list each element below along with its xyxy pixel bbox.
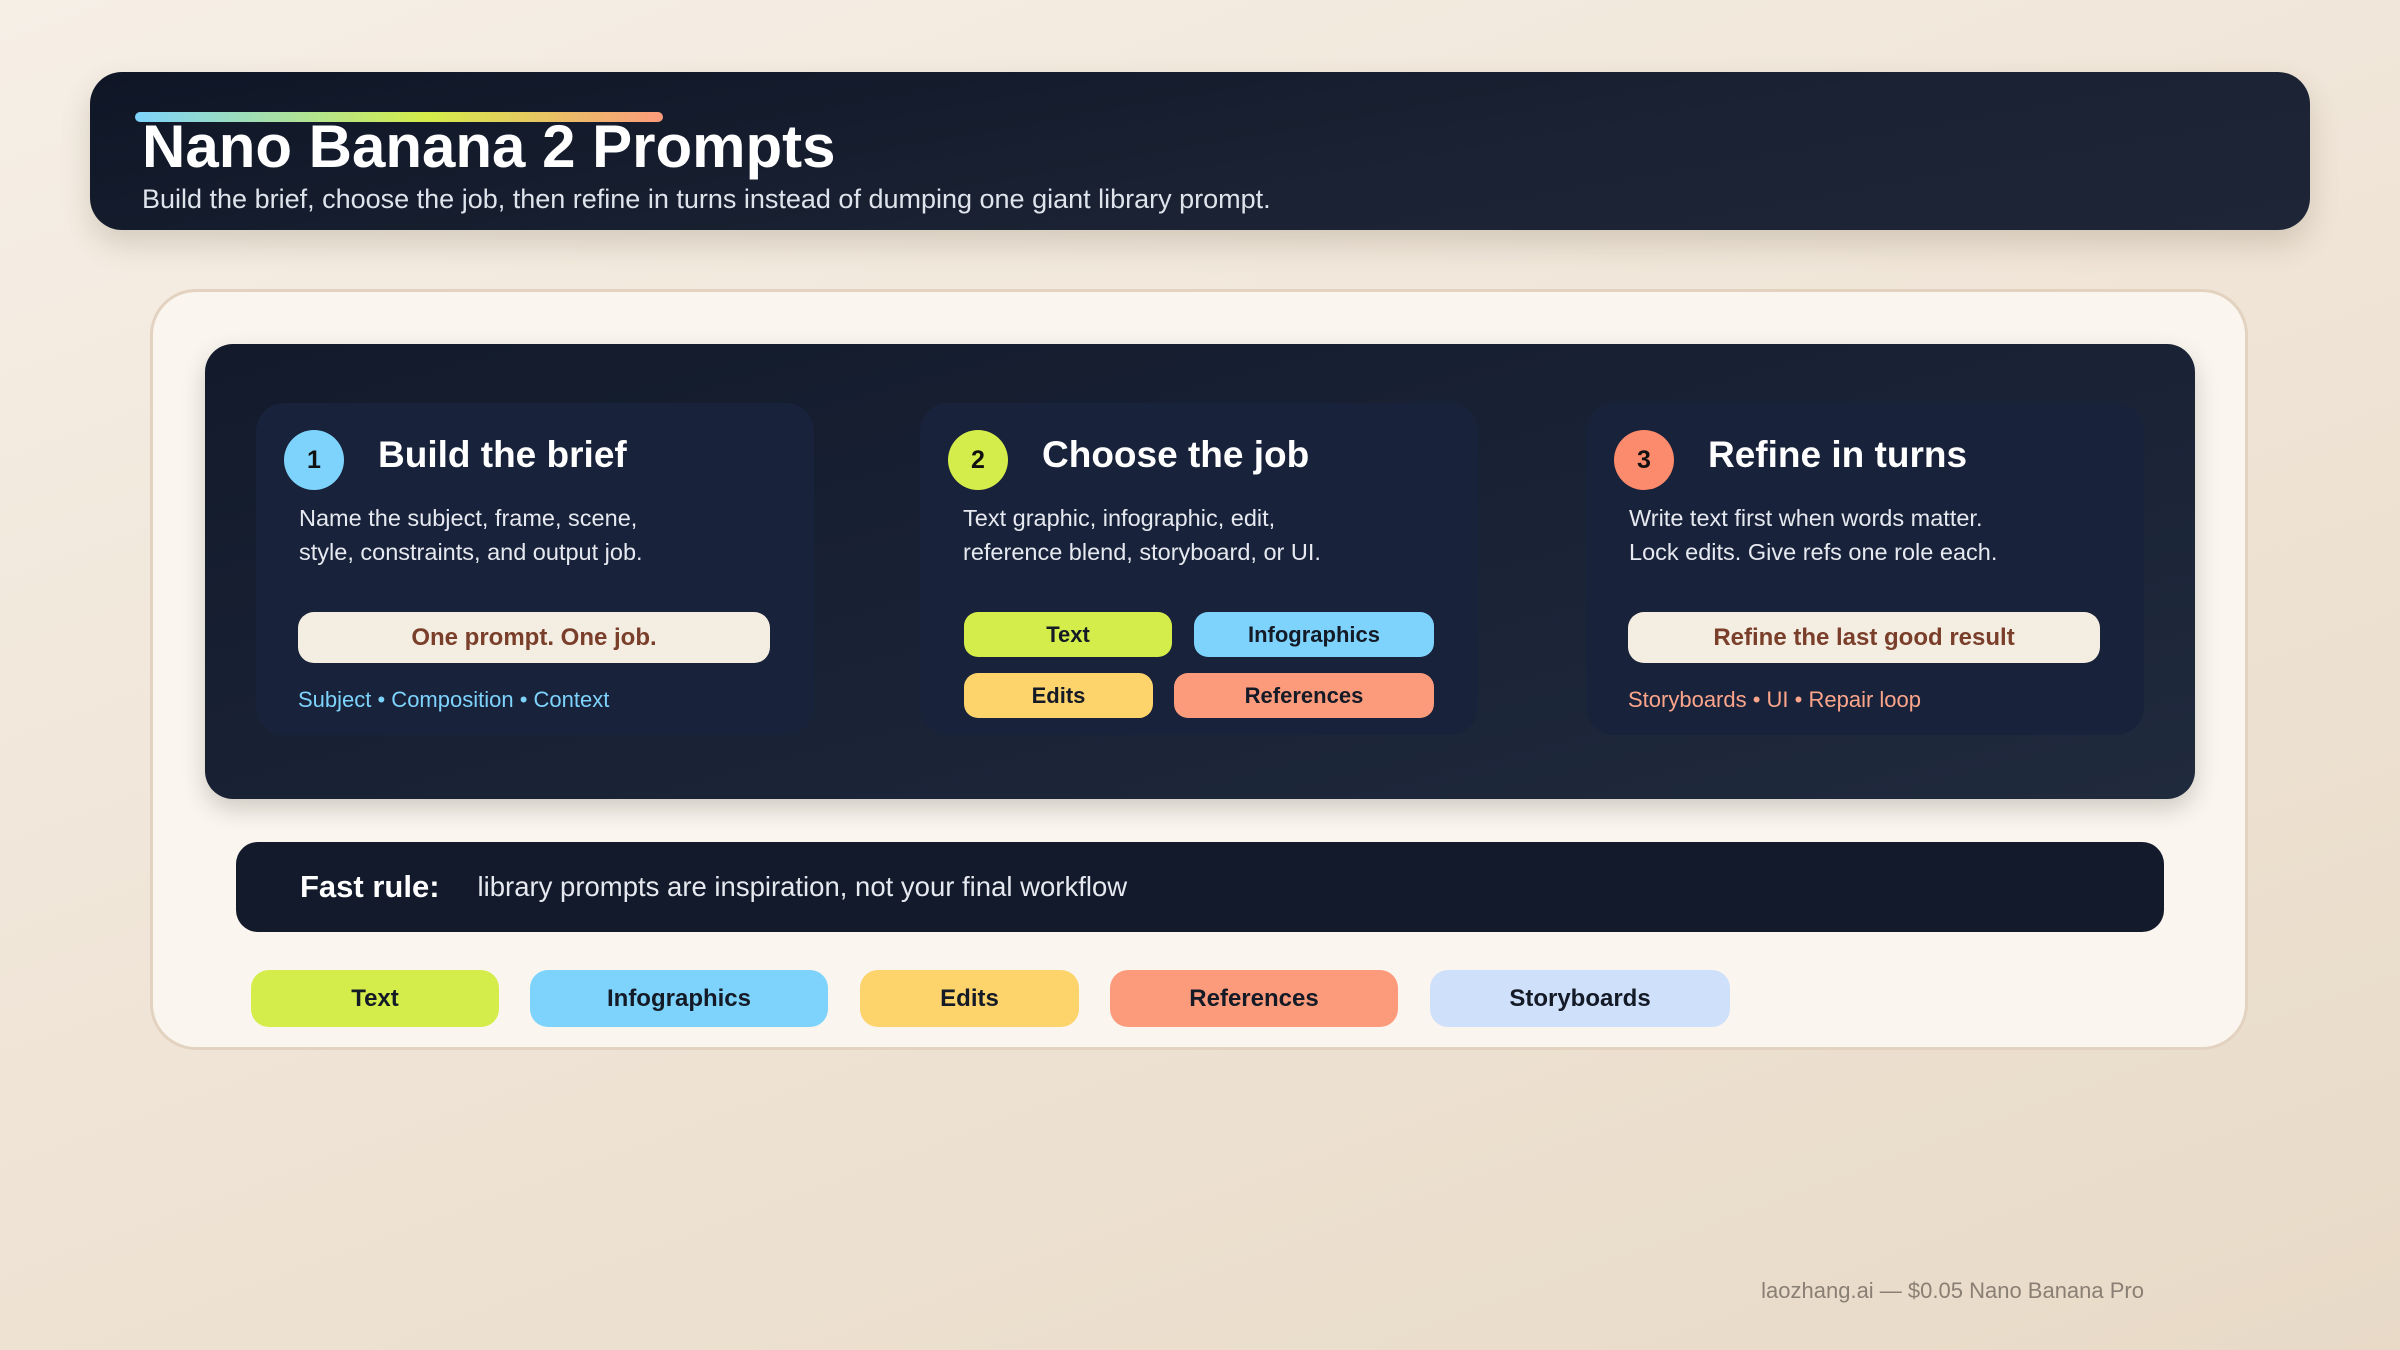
main panel — [150, 289, 2248, 1050]
category pills: Text — [351, 984, 399, 1012]
icon: step 2 — [948, 430, 1008, 490]
pill: One prompt. One job. — [411, 624, 657, 650]
description — [299, 505, 643, 565]
gradient accent bar — [135, 112, 663, 122]
fast rule bar: Fast rule: — [300, 869, 440, 904]
pill: Refine the last good result — [1713, 624, 2015, 650]
fast rule bar: library prompts are inspiration, not your final workflow — [478, 871, 1127, 902]
heading: Build the brief — [378, 434, 627, 475]
icon: step 1: 1 — [307, 446, 321, 474]
card 1: Build the brief — [256, 403, 814, 735]
category pills: Infographics — [607, 984, 751, 1012]
keywords: Subject • Composition • Context — [298, 687, 609, 712]
card 2: Choose the job — [920, 403, 1478, 735]
dark steps panel — [205, 344, 2195, 799]
tags: References — [1245, 682, 1363, 708]
tags — [964, 612, 1434, 718]
icon: step 1 — [284, 430, 344, 490]
fast rule bar — [236, 842, 2164, 932]
description: Write text first when words matter. — [1629, 505, 1982, 531]
description: Lock edits. Give refs one role each. — [1629, 539, 1997, 565]
tags: Text — [1046, 622, 1090, 646]
tags: Infographics — [1248, 622, 1380, 646]
category pills — [251, 970, 1730, 1027]
icon: step 3: 3 — [1637, 446, 1651, 474]
subtitle: Build the brief, choose the job, then refine in turns instead of dumping one giant library prompt. — [142, 184, 1271, 214]
description — [1629, 505, 1997, 565]
description: reference blend, storyboard, or UI. — [963, 539, 1321, 565]
heading: Choose the job — [1042, 434, 1309, 475]
description — [963, 505, 1321, 565]
description: Name the subject, frame, scene, — [299, 505, 637, 531]
description: Text graphic, infographic, edit, — [963, 505, 1275, 531]
description: style, constraints, and output job. — [299, 539, 643, 565]
category pills: Edits — [940, 984, 999, 1012]
card 3: Refine in turns — [1586, 403, 2144, 735]
category pills: Storyboards — [1509, 984, 1651, 1012]
title: Nano Banana 2 Prompts — [142, 113, 836, 180]
heading: Refine in turns — [1708, 434, 1967, 475]
tags: Edits — [1032, 682, 1085, 708]
category pills: References — [1189, 984, 1319, 1012]
keywords: Storyboards • UI • Repair loop — [1628, 687, 1921, 712]
footer credit: laozhang.ai — $0.05 Nano Banana Pro — [1761, 1278, 2144, 1303]
pill — [298, 612, 770, 663]
header banner — [90, 72, 2310, 230]
pill — [1628, 612, 2100, 663]
icon: step 3 — [1614, 430, 1674, 490]
icon: step 2: 2 — [971, 446, 985, 474]
